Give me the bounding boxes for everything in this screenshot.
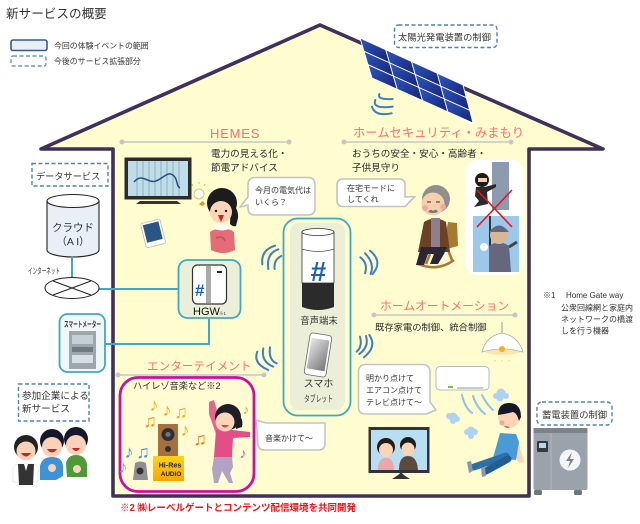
cloud database cylinder: （A I） (56, 236, 90, 248)
icon: monitor with power graph (124, 158, 192, 204)
icon: woman (207, 188, 238, 253)
panel: voice terminal and smartphone: 音声端末 (300, 315, 338, 326)
panel: security images (465, 160, 524, 275)
speech bubble: at-home mode (337, 179, 415, 206)
icon: light bulb (192, 182, 205, 206)
label: solar control: 太陽光発電装置の制御 (398, 32, 491, 42)
cloud database cylinder: クラウド (52, 222, 94, 234)
icon: dancing woman (209, 400, 250, 483)
icon: hi-res audio badge: Hi-Res (159, 460, 181, 470)
section: home automation (372, 299, 518, 332)
panel: voice terminal and smartphone: タブレット (304, 393, 333, 404)
speech bubble: at-home mode: 在宅モードに (347, 183, 395, 193)
icon: hi-res audio badge (153, 456, 184, 481)
icon: music notes: ♪ (150, 395, 158, 415)
HGW box: HGW (193, 306, 220, 318)
section: home security: 子供見守り (352, 162, 400, 174)
icon: speaker (158, 424, 178, 457)
section: HEMES (120, 126, 292, 174)
footnote 1: Home Gate way (566, 291, 623, 300)
icon: cool air (446, 388, 509, 439)
label: storage battery control (537, 402, 612, 425)
label: partner services: 新サービス (22, 404, 70, 415)
icon: solar wireless waves (372, 94, 393, 114)
icon: air conditioner (436, 366, 489, 390)
icon: music notes (118, 395, 249, 477)
panel: entertainment (116, 360, 266, 492)
speech bubble: electricity bill: 今月の電気代は (255, 185, 311, 195)
footnote 1 (543, 291, 633, 336)
smart meter box (60, 314, 105, 372)
icon: relaxing man (467, 403, 524, 477)
label: partner services: 参加企業による (22, 390, 89, 402)
footnote 1: ※1 (543, 291, 556, 300)
section: home security (342, 126, 524, 174)
icon: red cross (477, 190, 512, 227)
icon: music notes: ♫ (136, 442, 150, 462)
panel: entertainment: エンターテイメント (147, 360, 251, 373)
section: home security: おうちの安全・安心・高齢者・ (352, 148, 486, 160)
section: home security: ホームセキュリティ・みまもり (353, 126, 524, 140)
smart meter box: スマートメーター (64, 319, 101, 329)
icon: music notes: ♪ (124, 442, 134, 462)
legend: 今後のサービス拡張部分 (54, 56, 141, 66)
icon: music notes: ♪ (118, 457, 128, 477)
label: data service (32, 164, 108, 186)
footnote 1: ネットワークの橋渡 (561, 314, 633, 324)
section: HEMES: HEMES (210, 126, 260, 141)
footnote 1: 公衆回線網と家庭内 (561, 302, 633, 312)
speech bubble: electricity bill (240, 178, 315, 215)
speech bubble: play music: 音楽かけて〜 (265, 433, 313, 443)
icon: door (492, 162, 509, 210)
legend (11, 40, 149, 66)
HGW box: # (195, 281, 205, 300)
speech bubble: voice commands: 明かり点けて (366, 374, 414, 383)
section: HEMES: 電力の見える化・ (211, 148, 287, 160)
icon: ceiling lamp (482, 322, 523, 362)
speech bubble: electricity bill: いくら？ (255, 198, 287, 207)
cloud database cylinder (47, 194, 99, 257)
icon: music notes: ♪ (243, 402, 249, 417)
connection lines (72, 257, 209, 344)
speech bubble: voice commands: テレビ点けて〜 (366, 398, 422, 407)
icon: tablet (140, 219, 166, 248)
icon: smartphone (304, 333, 332, 377)
section: home automation: 既存家電の制御、統合制御 (375, 322, 487, 332)
icon: elderly man in chair (416, 185, 458, 267)
icon: music notes: ♫ (193, 429, 207, 449)
section: home automation: ホームオートメーション (380, 299, 509, 313)
house outline (41, 25, 603, 496)
panel: entertainment: ハイレゾ音楽など※2 (133, 380, 221, 391)
legend: 今回の体験イベントの範囲 (54, 40, 149, 50)
label: solar control (394, 25, 497, 48)
title: 新サービスの概要 (6, 7, 107, 21)
panel: voice terminal and smartphone (284, 218, 350, 416)
speech bubble: play music (256, 420, 325, 450)
label: partner services (18, 384, 89, 421)
icon: music notes: ♪ (162, 400, 172, 420)
window pane (473, 216, 519, 272)
section: HEMES: 節電アドバイス (211, 162, 278, 174)
icon: storage battery (534, 428, 588, 495)
panel: voice terminal and smartphone: スマホ (304, 378, 333, 390)
HGW box: ※1 (219, 311, 226, 316)
speech bubble: at-home mode: してくれ (347, 195, 379, 204)
speech bubble: voice commands: エアコン点けて (366, 386, 422, 395)
icon: voice terminal: # (310, 256, 326, 287)
label: data service: データサービス (36, 170, 100, 182)
solar panel (360, 38, 473, 123)
footnote 1: しを行う機器 (561, 326, 609, 336)
icon: hi-res audio badge: AUDIO (161, 471, 181, 478)
icon: voice terminal (302, 228, 334, 310)
internet node: インターネット (28, 266, 60, 276)
icon: music notes: ♫ (143, 411, 157, 431)
icon: music notes: ♪ (180, 420, 190, 440)
icon: window intruder (480, 216, 517, 272)
icon: three people (13, 427, 88, 485)
icon: television with drama (368, 427, 430, 479)
icon: small speaker (133, 462, 148, 480)
icon: music notes: ♫ (174, 402, 188, 422)
footnote 2: ※2 ㈱レーベルゲートとコンテンツ配信環境を共同開発 (120, 501, 356, 514)
internet node (28, 266, 99, 298)
label: storage battery control: 蓄電装置の制御 (542, 409, 607, 420)
icon: wireless waves around terminal (256, 246, 377, 370)
HGW box (178, 260, 240, 318)
icon: music notes: ♪ (240, 445, 246, 461)
icon: burglar (474, 173, 496, 207)
speech bubble: voice commands (358, 364, 436, 414)
